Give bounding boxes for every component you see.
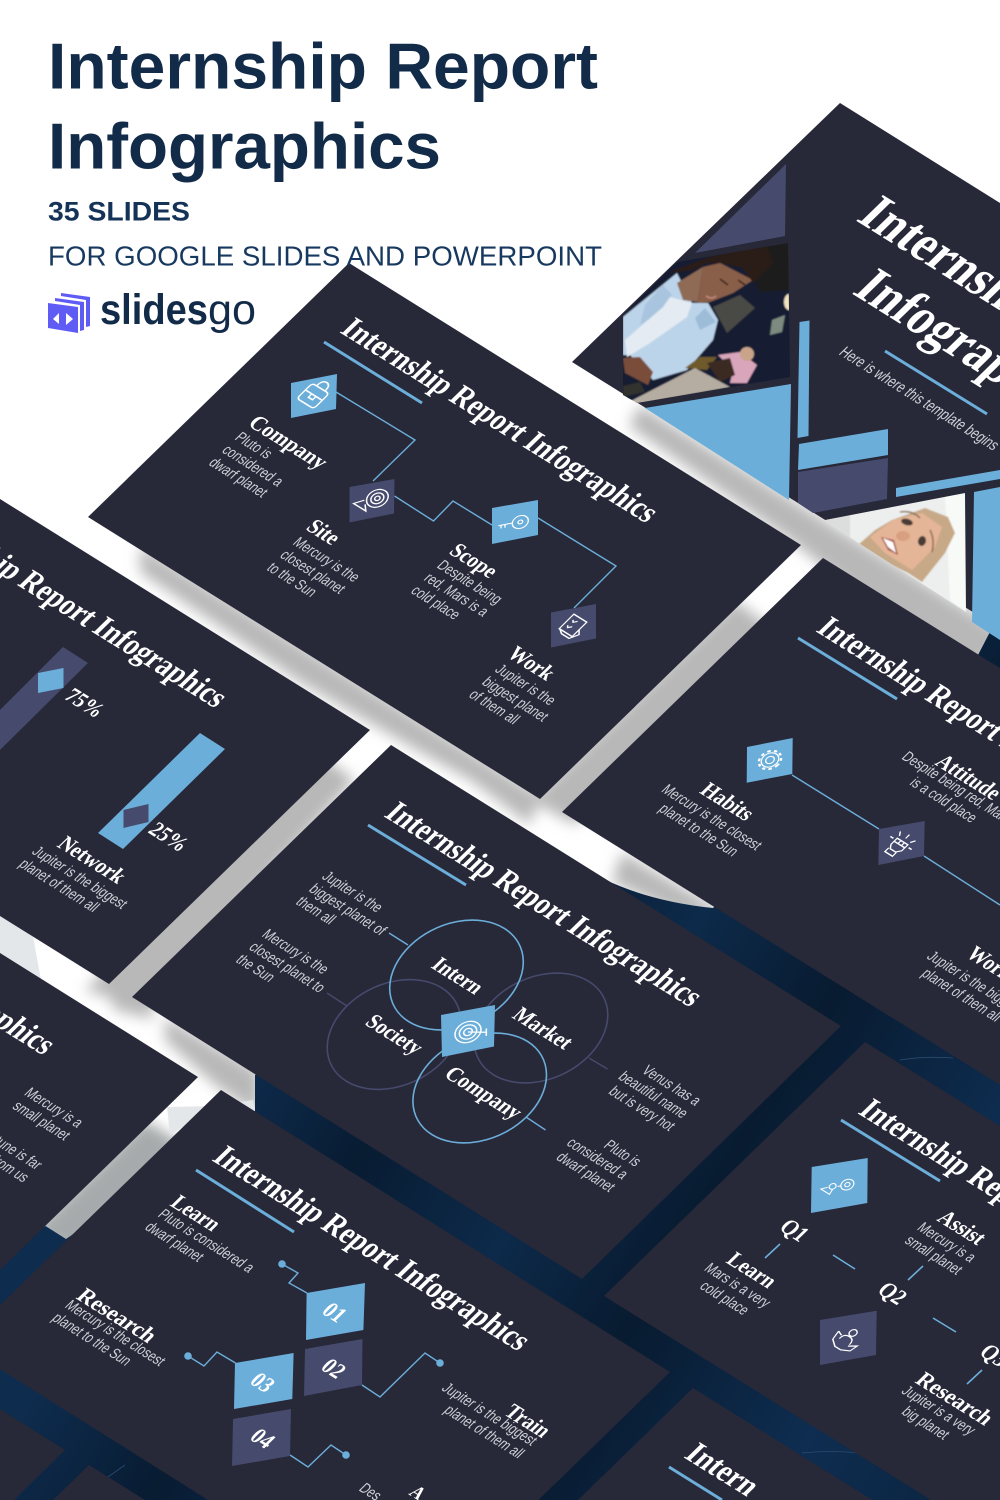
slide title: Internship Report Infographics [334, 311, 668, 529]
item: Learn text: Mars is a very [701, 1259, 776, 1311]
subtitle: platforms: FOR GOOGLE SLIDES AND POWERPOINT [48, 240, 602, 272]
cover photo: student with laptop [623, 243, 790, 403]
item: Site text [263, 515, 365, 610]
venn labels: Society [360, 1010, 429, 1059]
item: Work text: of them all [465, 686, 524, 727]
text: Jupiter: biggest planet of [305, 880, 391, 938]
venn labels: Market [507, 1003, 580, 1054]
logo: slidesgo [48, 286, 256, 334]
diamond 02 [304, 1339, 362, 1396]
item: Research text [885, 1368, 999, 1451]
logo: slidesgo: go [208, 286, 256, 334]
item: cut-off text [356, 1480, 431, 1500]
slide: bottom-centre lower slide [53, 1465, 145, 1500]
slide: Company Site Scope Work [88, 263, 801, 799]
main title [48, 30, 598, 182]
cover photo: smiling woman [825, 493, 966, 612]
diamond 04 [232, 1409, 291, 1466]
item: Research text [48, 1284, 170, 1382]
item: Network text [15, 832, 132, 924]
item: Learn text [688, 1248, 783, 1324]
bar 75%: 75% [59, 684, 111, 722]
item: Research text: planet to the Sun [48, 1309, 136, 1369]
cover shape: blue right block [972, 487, 1000, 640]
item: Company text: Pluto is [232, 429, 277, 462]
diamond 03: 03 [245, 1367, 281, 1397]
title underline [798, 638, 897, 699]
item: Learn text [141, 1191, 259, 1288]
text: Mercury: small planet [9, 1097, 75, 1143]
diamond 01: 01 [317, 1297, 353, 1327]
connector lines [336, 392, 616, 608]
text: Jupiter: Jupiter is the [319, 868, 388, 915]
subtitle: slide count: 35 SLIDES [48, 196, 190, 226]
cover shape: blue triangle [645, 384, 791, 500]
item: Scope text [407, 539, 507, 632]
slide: bottom-left lower slide [0, 1409, 65, 1500]
item: Train text: planet of them all [441, 1401, 529, 1461]
item: Habits text: Habits [695, 778, 760, 825]
item: Train text: Train [499, 1400, 557, 1442]
venn circles [300, 899, 635, 1164]
diamond 02: 02 [316, 1353, 352, 1383]
icon: fist with rays [878, 821, 925, 865]
slide: Venn diagram [132, 745, 841, 1279]
text: Mercury: Mercury is a [21, 1084, 88, 1130]
text: Venus: Venus has a [638, 1062, 706, 1108]
quarter labels [774, 1214, 1000, 1371]
light highlight folds [0, 916, 255, 1135]
title underline [841, 1120, 940, 1181]
cover shape: blue strip [896, 470, 1000, 497]
text: Mercury: closest planet to [245, 938, 330, 996]
logo: slidesgo: slides [100, 286, 208, 334]
icon: caring hand [820, 1311, 877, 1365]
dark navy background [0, 628, 1000, 1500]
item: Train text [425, 1379, 557, 1461]
text: Jupiter: them all [292, 893, 340, 927]
dashes [765, 1244, 982, 1384]
item: Assist text: Assist [932, 1206, 993, 1250]
quarter labels: Q1 [774, 1214, 815, 1246]
connectors with dots [184, 1260, 444, 1467]
item: Research text: Research [910, 1368, 999, 1430]
item: Work text: Jupiter is the [492, 661, 561, 708]
title underline [324, 342, 422, 403]
item: Company text [205, 411, 334, 502]
venn labels [360, 953, 580, 1124]
item: Work text [465, 642, 566, 737]
connector lines [792, 775, 1000, 905]
item: Habits text: Mercury is the closest [658, 781, 766, 853]
text: Venus: but is very hot [605, 1083, 680, 1134]
text: Pluto: dwarf planet [553, 1149, 620, 1195]
item: Network text: Network [52, 832, 132, 888]
text: Mercury: the Sun [232, 951, 280, 985]
cover shape: purple triangle [695, 164, 786, 253]
cover shape: thin blue bar [798, 320, 810, 438]
item: Research text: big planet [898, 1403, 954, 1442]
text: Venus: beautiful name [615, 1068, 693, 1121]
item: Learn text: cold place [696, 1277, 754, 1318]
item: Learn text: Pluto is considered a [155, 1206, 259, 1276]
venn labels: Intern [426, 953, 490, 999]
header [48, 30, 602, 334]
item: Assist text [901, 1206, 993, 1278]
bar 75% [0, 647, 111, 750]
bar 25% [98, 733, 225, 856]
text: Mercury: Mercury is the [259, 926, 334, 977]
grey shadows between slides [0, 405, 1000, 1255]
item: Site text: Site [301, 515, 347, 550]
main title: Infographics [48, 110, 441, 182]
item: Network text: planet of them all [15, 855, 104, 915]
connector lines [327, 933, 608, 1130]
item: Network text: Jupiter is the biggest [29, 843, 132, 912]
icon: Habits gear [747, 738, 793, 783]
bar 25%: 25% [143, 818, 195, 856]
cover subtitle: Here is where this template begins [835, 344, 1000, 454]
cover shape: purple block [798, 458, 888, 513]
item: Assist text: small planet [901, 1232, 967, 1278]
title underline [196, 1170, 294, 1232]
slide: numbered diamonds [0, 1090, 670, 1500]
slide: Q1 Q2 Q3 roadmap [604, 1042, 1000, 1500]
slide: Network progress bars [0, 496, 370, 984]
icon: Q1 flower [811, 1158, 868, 1213]
item: Scope text: cold place [407, 582, 465, 623]
item: Habits text: planet to the Sun [655, 800, 743, 859]
slide title: Internship Report Infographics [206, 1139, 540, 1357]
item: Site text: Mercury is the [290, 534, 365, 585]
item: Train text: Jupiter is the biggest [438, 1379, 542, 1448]
cover shape: blue block [798, 429, 888, 470]
item: Company text: dwarf planet [205, 454, 272, 500]
title underline [669, 1467, 722, 1500]
item: Site text: to the Sun [263, 559, 321, 600]
diamond 04: 04 [245, 1423, 281, 1453]
item: Work text: Work [502, 642, 561, 685]
item: Company text: Company [243, 411, 334, 474]
icon: Work document [551, 604, 596, 648]
item: Research text: Jupiter is a very [898, 1382, 981, 1438]
diamond 01 [306, 1283, 365, 1340]
diamond 03 [234, 1353, 294, 1409]
title underline [368, 825, 466, 885]
item: Research text: Mercury is the closest [62, 1297, 170, 1369]
main title: Internship Report [48, 30, 598, 102]
slide: far-left text slide [0, 843, 198, 1270]
icon: Site target [350, 479, 394, 522]
item: Work text [910, 942, 1000, 1029]
item: Scope text: Scope [444, 539, 504, 583]
item: Learn text: Learn [721, 1248, 783, 1293]
item: Research text: Research [71, 1284, 163, 1347]
icon: Company bag [291, 374, 337, 418]
slide title: Internship Report Infographics [378, 795, 712, 1013]
item: Site text: closest planet [276, 546, 350, 597]
item: Attitude text: is a cold place [906, 774, 982, 826]
venn labels: Company [439, 1062, 529, 1124]
slide: cover [572, 103, 1000, 640]
item: Work text: biggest planet [478, 673, 553, 724]
text: Pluto: considered a [563, 1134, 633, 1182]
item: Learn text: Learn [165, 1191, 227, 1236]
quarter labels: Q2 [872, 1277, 913, 1309]
icon: Scope key [492, 500, 538, 544]
item: Learn text: dwarf planet [141, 1218, 208, 1265]
item: Scope text: red, Mars is a [420, 569, 493, 619]
item: Company text: considered a [218, 441, 288, 489]
slide: bottom-right cut-off slide [578, 1388, 872, 1500]
text: Pluto: Pluto is [600, 1136, 646, 1169]
icon: center target [441, 1005, 495, 1057]
slide: Habits timeline [562, 558, 1000, 1085]
item: Assist text: Mercury is a [914, 1219, 981, 1265]
cover underline [885, 351, 987, 414]
item: Scope text: Despite being [434, 557, 507, 607]
